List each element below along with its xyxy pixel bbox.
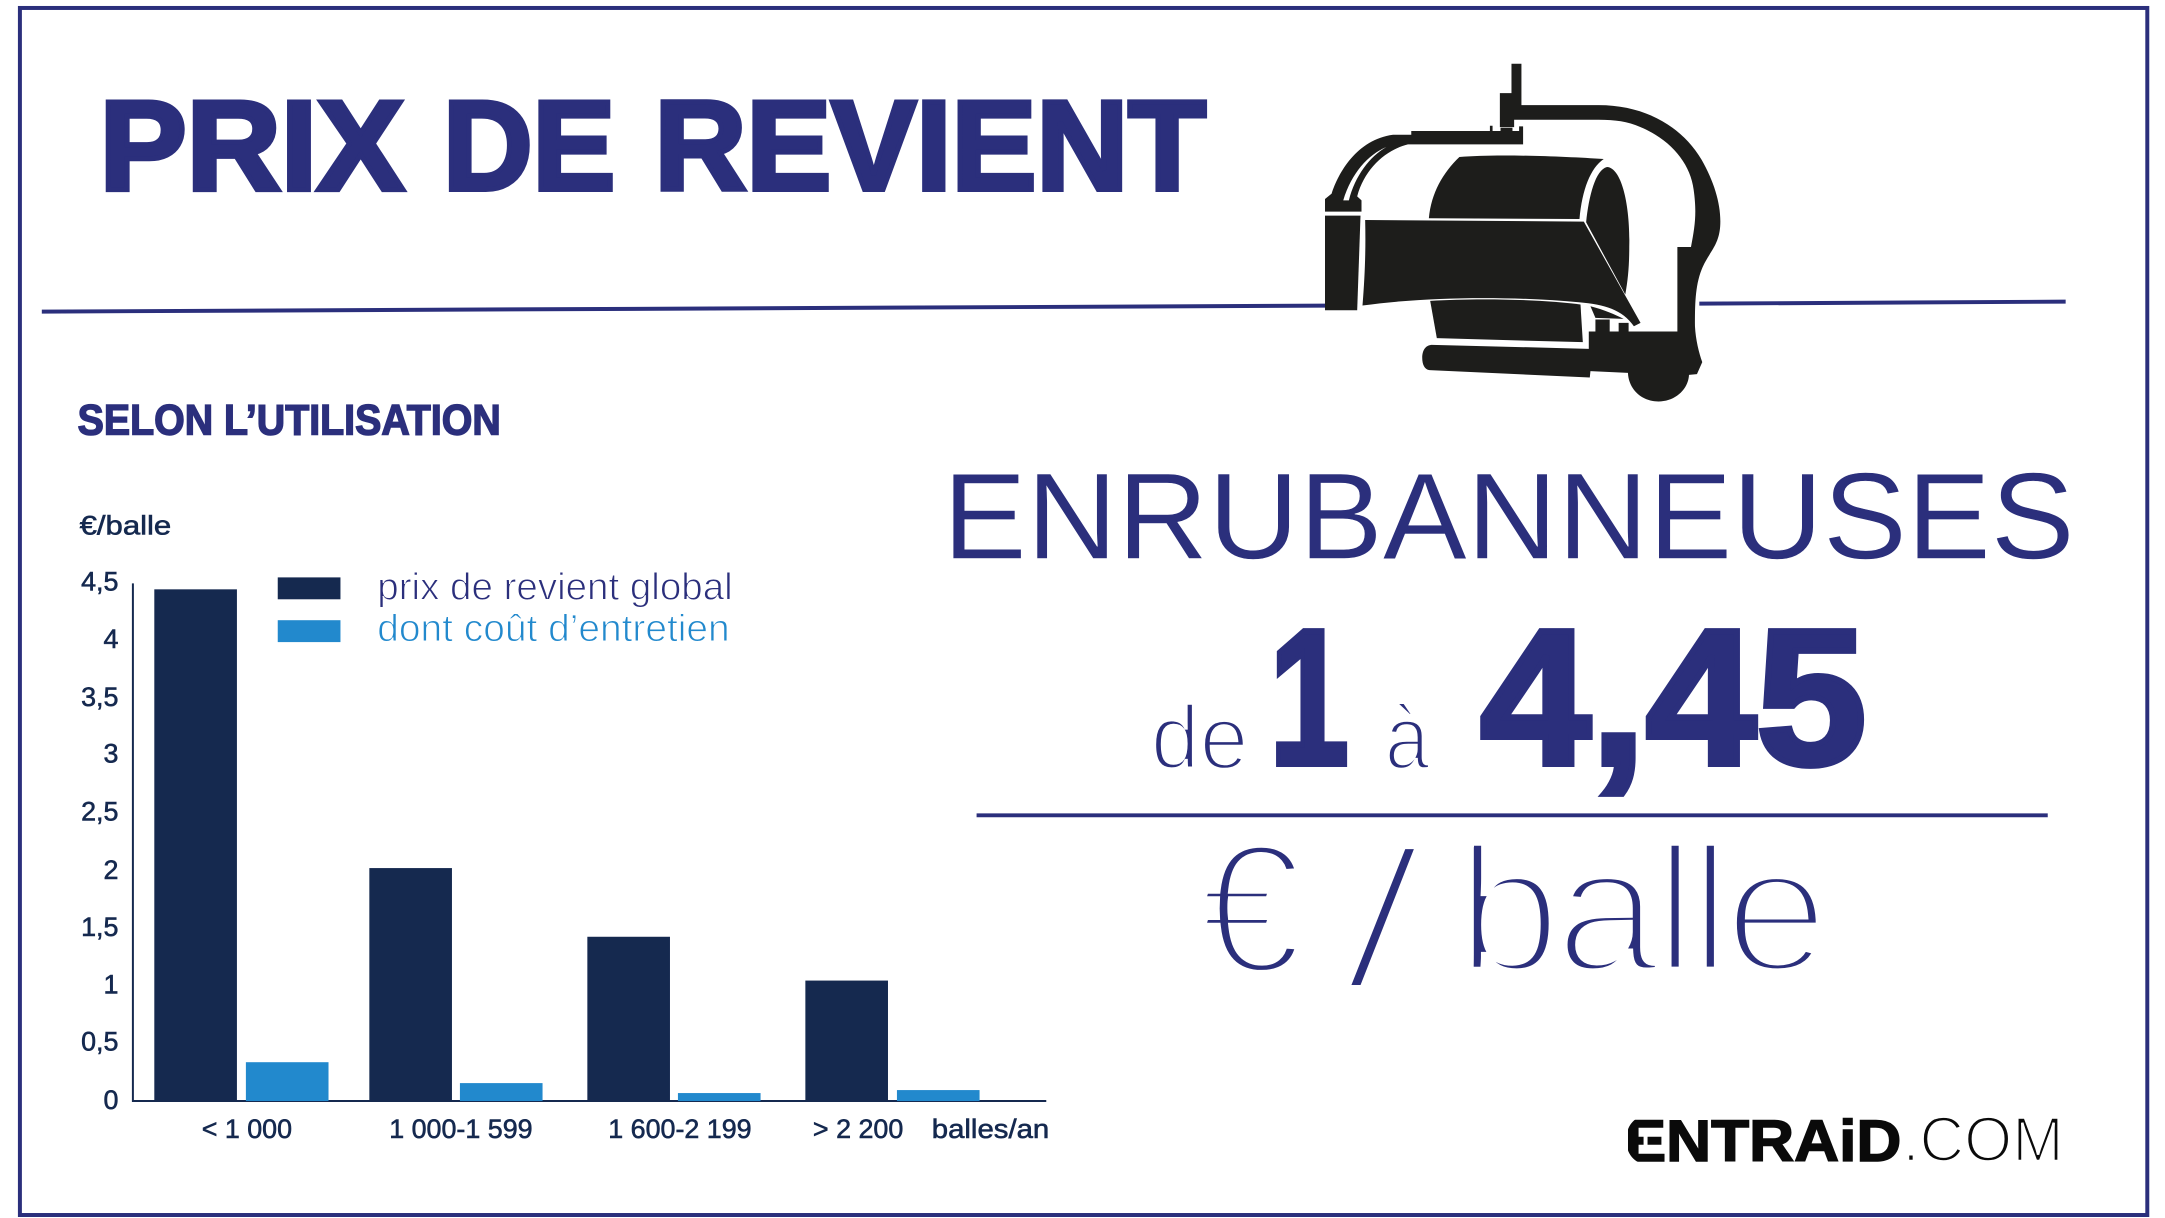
legend <box>278 566 733 650</box>
unit: euro per bale: € <box>1200 806 1303 1013</box>
x axis labels <box>202 1114 1049 1144</box>
x axis labels: < 1 000 <box>202 1114 292 1144</box>
title rule left <box>42 306 1326 312</box>
y axis labels: 0,5 <box>81 1026 118 1056</box>
y axis labels: 1 <box>104 970 118 1000</box>
dark bars: prix de revient global <box>154 589 888 1101</box>
logo: entraid.com: .COM <box>1902 1105 2064 1175</box>
headline: enrubanneuses: ENRUBANNEUSES <box>943 447 2075 584</box>
title: DE <box>443 76 615 218</box>
legend: dont coût d’entretien <box>377 608 730 650</box>
y axis labels: 3,5 <box>81 682 118 712</box>
title: PRIX <box>100 76 404 218</box>
x axis labels: balles/an <box>932 1114 1049 1144</box>
unit: euro per bale <box>1200 806 1829 1030</box>
price range: 4,45 <box>1480 589 1867 805</box>
axes <box>133 583 1046 1101</box>
title <box>100 76 1206 218</box>
y axis labels: 1,5 <box>81 912 118 942</box>
unit: euro per bale: balle <box>1457 809 1829 1009</box>
title rule right <box>1699 302 2066 304</box>
unit: euro per bale: / <box>1343 810 1423 1030</box>
y axis unit: €/balle <box>80 511 171 541</box>
x axis labels: > 2 200 <box>813 1114 903 1144</box>
y axis labels: 4 <box>104 624 119 654</box>
section heading: SELON L’UTILISATION <box>78 397 501 445</box>
icon: bale wrapper machine <box>1325 64 1720 401</box>
price range <box>1151 589 1867 805</box>
y axis labels: 4,5 <box>81 566 118 596</box>
y axis labels: 3 <box>104 739 118 769</box>
price range: à <box>1385 688 1430 788</box>
x axis labels: 1 600-2 199 <box>608 1114 752 1144</box>
price range: de <box>1151 688 1248 788</box>
logo: entraid.com <box>1623 1105 2064 1175</box>
bar chart <box>80 511 1049 1144</box>
blue bars: coût d'entretien <box>246 1062 980 1101</box>
title: REVIENT <box>655 76 1206 218</box>
y axis labels: 2 <box>104 855 118 885</box>
price divider <box>977 813 2048 817</box>
y axis labels: 0 <box>104 1085 118 1115</box>
price range: 1 <box>1269 589 1349 805</box>
y axis labels <box>81 566 119 1115</box>
logo: entraid.com: ENTRAiD <box>1625 1109 1901 1174</box>
legend: prix de revient global <box>377 566 733 608</box>
y axis labels: 2,5 <box>81 796 118 826</box>
x axis labels: 1 000-1 599 <box>389 1114 533 1144</box>
